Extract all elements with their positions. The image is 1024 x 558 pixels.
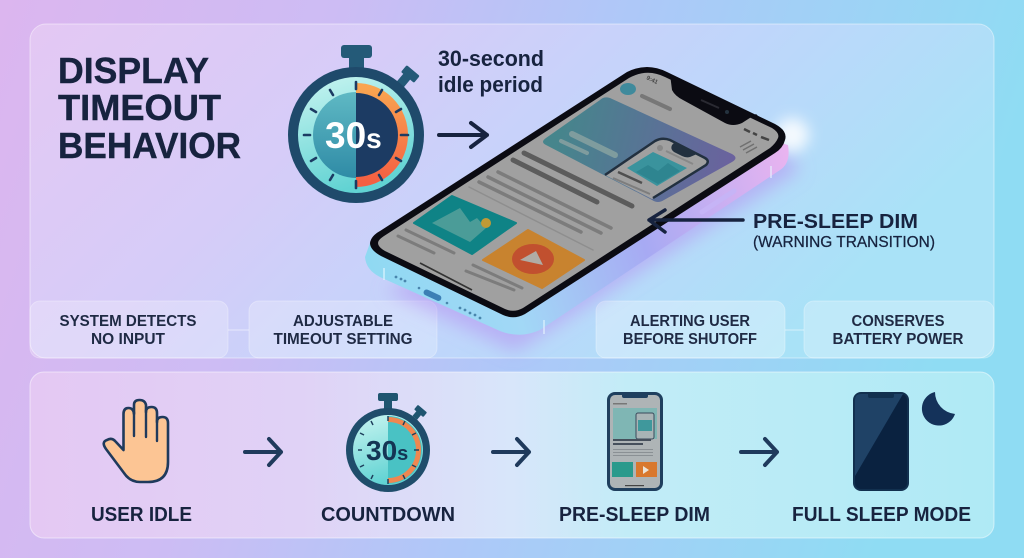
callout: alerting user before shutoff: BEFORE SHUTOFF — [623, 331, 757, 348]
title: BEHAVIOR — [58, 125, 241, 166]
callout: alerting user before shutoff: ALERTING USER — [630, 313, 750, 330]
icon: hand — [104, 400, 168, 482]
callout: system detects no input: NO INPUT — [91, 331, 165, 348]
callout: system detects no input: SYSTEM DETECTS — [60, 313, 197, 330]
arrow: step one to two — [245, 439, 281, 465]
callout: adjustable timeout setting: TIMEOUT SETTING — [274, 331, 412, 348]
menu icon — [740, 141, 757, 153]
phone bezel — [370, 67, 786, 317]
status bar: 9:41 — [645, 75, 659, 86]
captions — [398, 230, 522, 290]
arrow: step two to three — [493, 439, 529, 465]
callout: adjustable timeout setting — [249, 301, 437, 358]
content bars — [469, 153, 632, 250]
phone: dimmed screen — [365, 67, 789, 335]
label: user idle: USER IDLE — [91, 503, 192, 526]
arrow: step three to four — [741, 439, 777, 465]
panel: sequence — [30, 372, 994, 538]
phone side highlights — [384, 166, 771, 334]
idle period label: idle period — [438, 72, 543, 97]
avatar and header — [620, 83, 670, 109]
label: full sleep mode: FULL SLEEP MODE — [792, 503, 971, 526]
title: DISPLAY — [58, 50, 209, 91]
label: pre-sleep dim: PRE-SLEEP DIM — [559, 503, 710, 526]
callout: conserves battery power — [804, 301, 994, 358]
idle period label — [438, 46, 544, 97]
home bar — [420, 263, 472, 290]
callout: system detects no input — [30, 301, 228, 358]
phone side edge — [365, 140, 789, 335]
icon: moon — [922, 392, 955, 426]
notch — [670, 74, 760, 125]
shadow and glow around phone — [385, 118, 809, 352]
icon: large stopwatch: 30s — [325, 115, 382, 156]
icon: dimmed phone — [607, 392, 663, 491]
label: countdown: COUNTDOWN — [321, 503, 455, 526]
arrow: pre-sleep dim pointer — [649, 210, 743, 232]
arrow: timer to phone — [439, 123, 487, 147]
title — [58, 50, 241, 166]
panel: phone overview — [30, 24, 994, 358]
status bar — [645, 75, 769, 140]
pre-sleep label: PRE-SLEEP DIM — [753, 210, 918, 233]
icon: small stopwatch — [346, 393, 430, 492]
callout: conserves battery power: CONSERVES — [852, 313, 945, 330]
idle period label: 30-second — [438, 46, 544, 71]
orange video card — [483, 230, 584, 288]
icon: small stopwatch: 30s — [366, 435, 408, 466]
phone ports and speakers — [395, 191, 734, 319]
inset phone — [605, 139, 708, 199]
icon: large stopwatch — [288, 45, 424, 203]
teal image card — [414, 196, 516, 254]
callout: adjustable timeout setting: ADJUSTABLE — [293, 313, 393, 330]
pre-sleep label — [753, 210, 935, 251]
callout: conserves battery power: BATTERY POWER — [832, 331, 964, 348]
phone screen — [378, 73, 778, 311]
connectors — [228, 329, 804, 331]
callout: alerting user before shutoff — [596, 301, 785, 358]
notch speaker and camera — [701, 100, 729, 114]
title: TIMEOUT — [58, 87, 221, 128]
icon: sleeping phone — [853, 392, 909, 491]
pre-sleep label: (WARNING TRANSITION) — [753, 234, 935, 251]
hero text bars — [561, 134, 615, 155]
hero card — [543, 97, 736, 202]
